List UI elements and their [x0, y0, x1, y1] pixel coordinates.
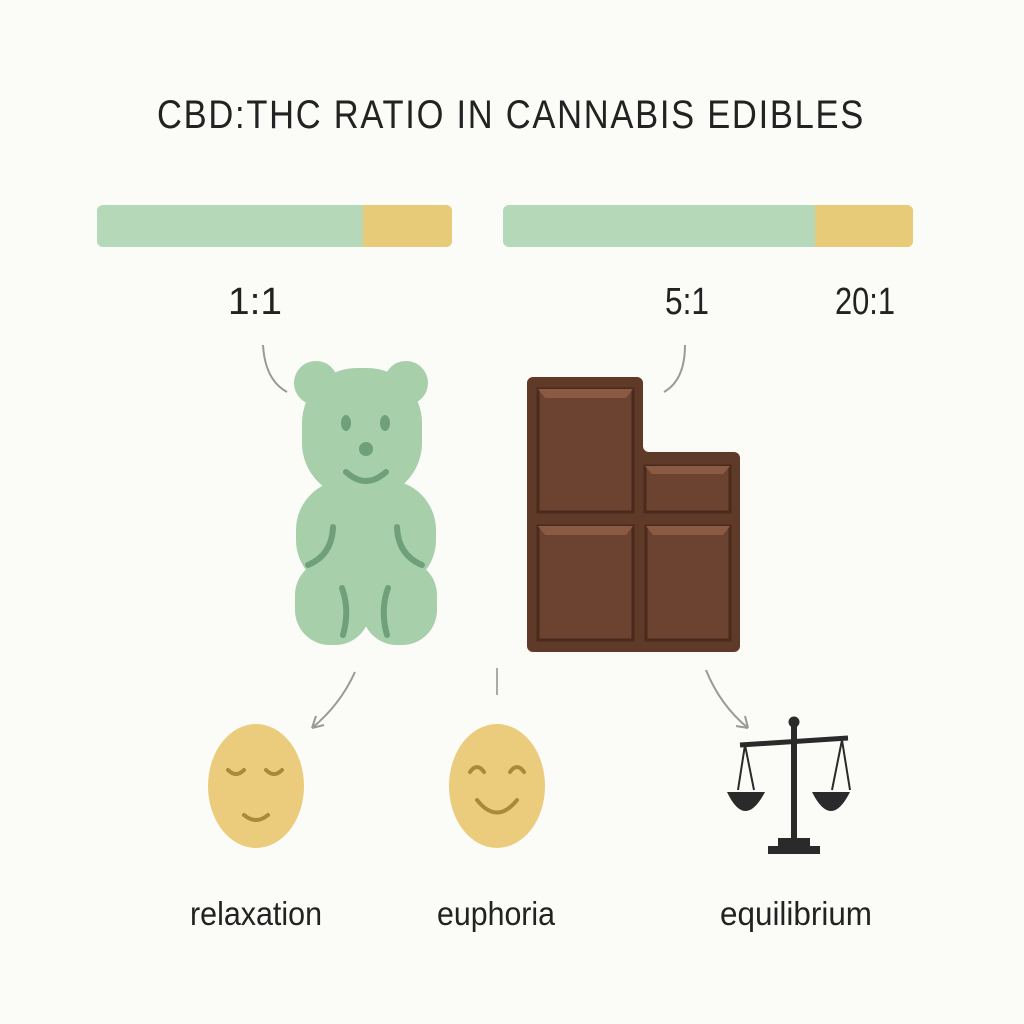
label: euphoria: euphoria	[437, 895, 556, 932]
bar: right ratio	[503, 205, 913, 247]
icon: happy face	[449, 724, 545, 848]
connector: 1:1 to bear	[263, 345, 287, 392]
bar: left ratio	[97, 205, 452, 247]
title: CBD:THC RATIO IN CANNABIS EDIBLES	[157, 93, 865, 137]
label: equilibrium: equilibrium	[720, 895, 872, 932]
connector: 5:1 to chocolate	[664, 345, 685, 392]
icon: chocolate bar	[527, 377, 740, 652]
label 20:1: 20:1	[835, 281, 895, 323]
label 5:1: 5:1	[665, 281, 709, 323]
label 1:1: 1:1	[228, 281, 282, 323]
icon: balance scale	[727, 717, 850, 854]
connector: euphoria	[496, 668, 498, 695]
icon: gummy bear	[294, 361, 437, 645]
arrow: bear to relaxation	[312, 672, 355, 728]
label: relaxation: relaxation	[190, 895, 322, 932]
icon: relaxed face	[208, 724, 304, 848]
arrow: chocolate to equilibrium	[706, 670, 748, 728]
